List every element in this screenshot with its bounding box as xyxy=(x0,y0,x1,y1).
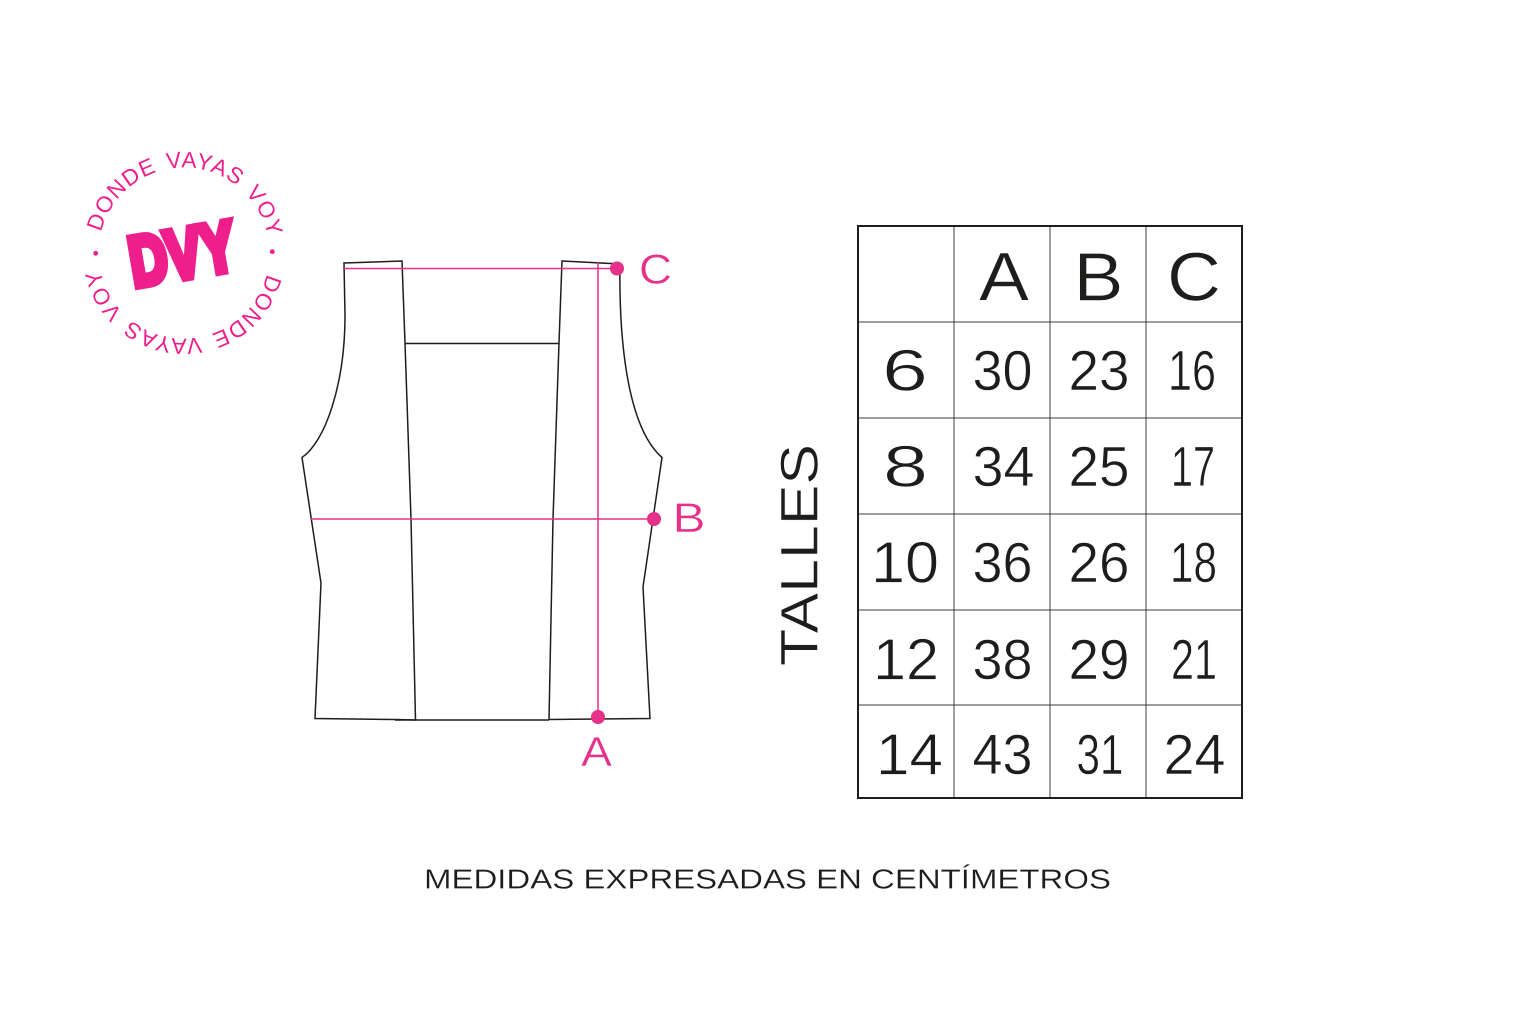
row: talle 8: 25 xyxy=(1068,435,1130,499)
row: talle 12: 12 xyxy=(873,628,939,692)
measurement A: total length xyxy=(581,262,612,775)
row: talle 8: 8 xyxy=(883,434,928,500)
vertical heading: TALLES: TALLES xyxy=(770,444,830,666)
header row: A B C: C xyxy=(1167,238,1221,316)
row: talle 14: 43 xyxy=(972,723,1032,787)
circular slogan, upper half: DONDE VAYAS VOY xyxy=(86,152,283,232)
row: talle 12: 21 xyxy=(1171,628,1217,692)
row: talle 8 xyxy=(883,434,1215,500)
circular slogan, lower half: DONDE VAYAS VOY xyxy=(85,274,282,354)
row: talle 14 xyxy=(876,722,1226,788)
measurement B: bust width: B xyxy=(672,494,706,541)
footnote: MEDIDAS EXPRESADAS EN CENTÍMETROS xyxy=(424,864,1111,894)
row: talle 14: 24 xyxy=(1164,723,1226,787)
row: talle 10: 26 xyxy=(1068,531,1130,595)
measurement C: shoulder width: C xyxy=(639,246,672,292)
right front panel outline xyxy=(549,261,662,720)
header row: A B C: A xyxy=(979,238,1029,316)
row: talle 8: 34 xyxy=(972,435,1034,499)
row: talle 6: 30 xyxy=(972,339,1032,403)
hem xyxy=(395,719,549,721)
header row: A B C xyxy=(979,238,1221,316)
garment diagram: top flat sketch xyxy=(302,261,662,720)
row: talle 12 xyxy=(873,628,1217,692)
separator dot right xyxy=(270,249,275,254)
left front panel outline xyxy=(302,261,416,720)
separator dot left xyxy=(93,251,98,256)
row: talle 12: 29 xyxy=(1068,628,1130,692)
row: talle 14: 31 xyxy=(1076,723,1124,787)
logo letters DVY: DVY xyxy=(123,207,241,301)
row: talle 14: 14 xyxy=(876,722,943,788)
table grid xyxy=(858,226,1242,798)
row: talle 10: 18 xyxy=(1170,531,1217,595)
row: talle 10: 36 xyxy=(972,531,1032,595)
neckline xyxy=(405,342,559,344)
row: talle 6: 6 xyxy=(882,338,928,404)
row: talle 10: 10 xyxy=(871,530,939,596)
row: talle 12: 38 xyxy=(972,628,1032,692)
row: talle 6: 16 xyxy=(1168,339,1216,403)
row: talle 8: 17 xyxy=(1171,435,1215,499)
size table xyxy=(858,226,1242,798)
row: talle 6 xyxy=(882,338,1216,404)
row: talle 6: 23 xyxy=(1068,339,1130,403)
measurement B: bust width xyxy=(311,494,706,541)
measurement A: total length: A xyxy=(581,728,612,775)
row: talle 10 xyxy=(871,530,1217,596)
header row: A B C: B xyxy=(1074,238,1124,316)
logo stamp: DVY xyxy=(85,152,283,354)
measurement C: shoulder width xyxy=(344,246,672,292)
